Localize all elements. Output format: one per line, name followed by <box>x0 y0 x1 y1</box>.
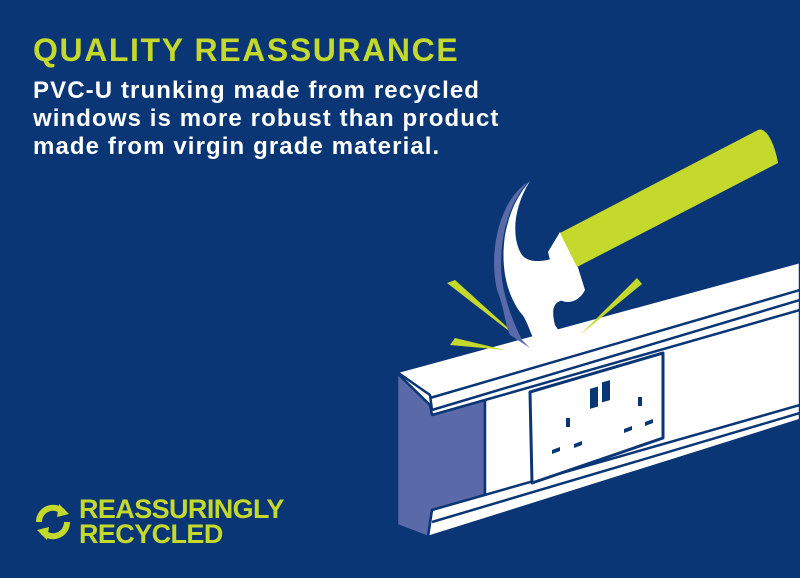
socket plate <box>530 353 663 483</box>
hammer <box>494 130 778 348</box>
sparks <box>447 278 642 350</box>
logo text: REASSURINGLY <box>79 494 284 524</box>
body text: PVC-U trunking made from recycled <box>33 77 480 104</box>
logo text <box>79 494 284 549</box>
title: QUALITY REASSURANCE <box>33 32 459 68</box>
trunking <box>397 262 800 537</box>
socket details <box>552 380 653 454</box>
logo: reassuringly recycled <box>36 494 284 549</box>
icon: recycle arrows <box>36 504 70 540</box>
body text <box>32 77 500 160</box>
logo text: RECYCLED <box>79 519 223 549</box>
body text: windows is more robust than product <box>33 105 500 132</box>
body text: made from virgin grade material. <box>33 133 440 160</box>
